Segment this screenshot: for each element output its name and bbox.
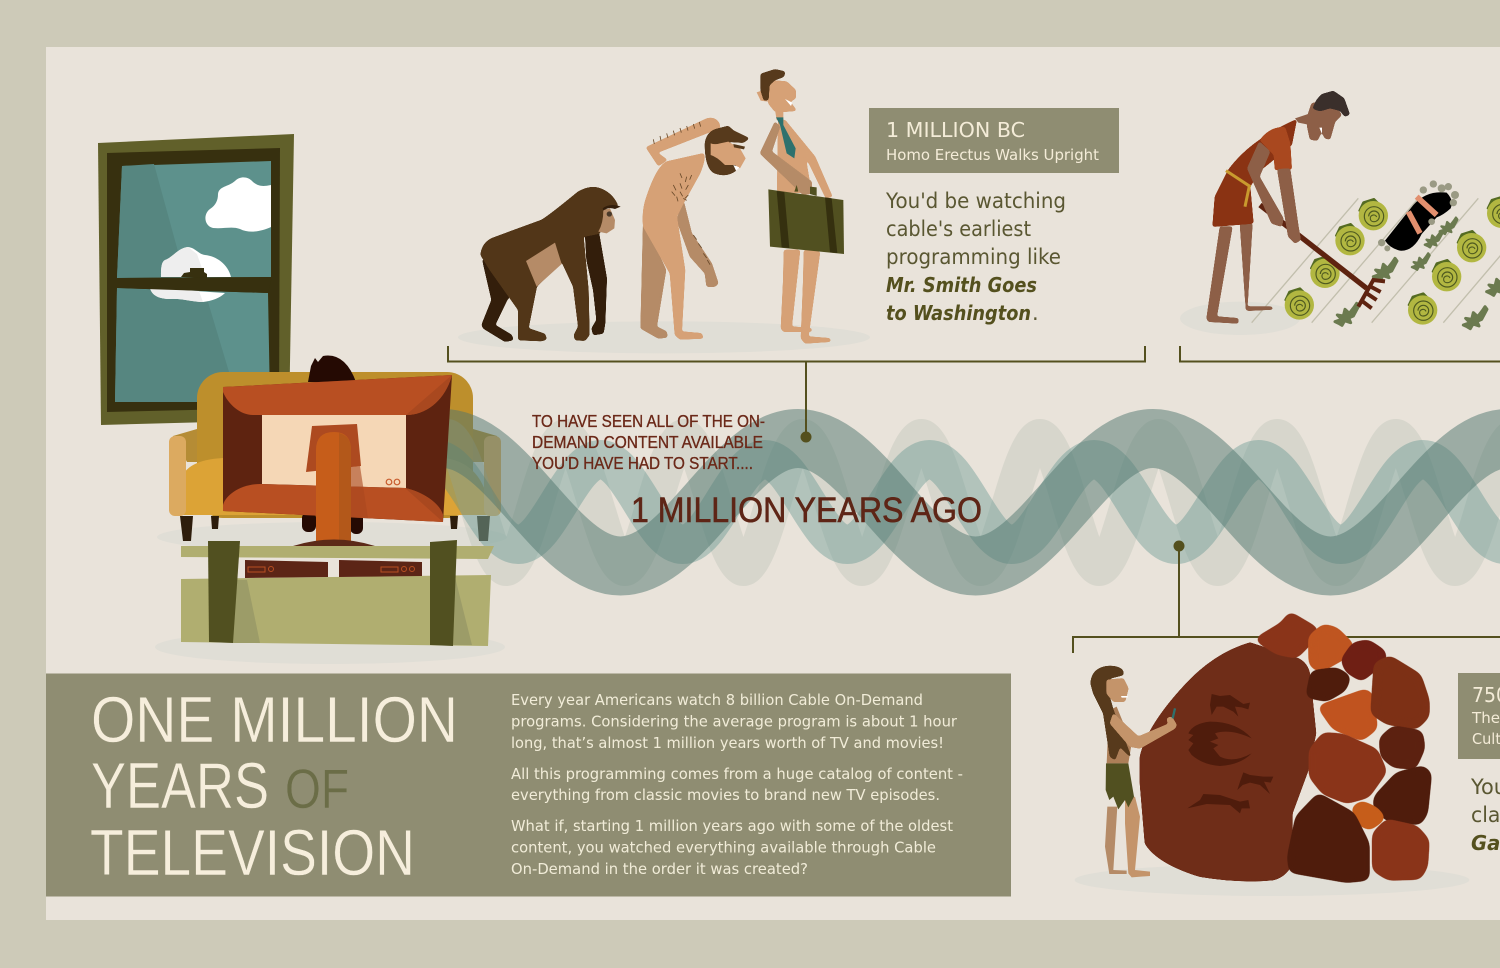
title: ONE MILLION xyxy=(91,683,458,756)
illustration: cave painter and rock wall xyxy=(1075,613,1469,896)
callout: intro to timeline: TO HAVE SEEN ALL OF THE ON- xyxy=(532,411,765,431)
icon: window xyxy=(98,134,294,425)
figure: businessman with briefcase xyxy=(757,69,844,343)
ground shadow xyxy=(1180,302,1300,335)
text: 1 million BC description: cable's earliest xyxy=(886,217,1031,241)
large painted rock xyxy=(1140,643,1316,881)
text: 1 million BC description: You'd be watching xyxy=(885,189,1066,213)
text: introduction: What if, starting 1 million years ago with some of the oldest xyxy=(511,817,953,835)
text: 1 million BC description xyxy=(885,189,1066,325)
icon: television xyxy=(223,375,452,546)
title: TELEVISION xyxy=(90,816,415,889)
title: YEARS xyxy=(91,749,269,822)
panel: 750 label (cropped at edge) xyxy=(1458,673,1500,759)
text: 1 million BC description: to Washington xyxy=(886,301,1031,325)
text: introduction: long, that’s almost 1 million years worth of TV and movies! xyxy=(511,734,944,752)
ground shadow xyxy=(1075,864,1469,896)
text: introduction: Every year Americans watch 8 billion Cable On-Demand xyxy=(511,691,923,709)
wave timeline ribbons xyxy=(436,419,1500,586)
text: 750 description (cropped at edge) xyxy=(1470,775,1500,855)
text: 1 million BC description: Mr. Smith Goes xyxy=(886,273,1037,297)
illustration: evolution from ape to businessman xyxy=(458,69,870,353)
figure: cave painter xyxy=(1091,666,1177,877)
text: introduction: programs. Considering the average program is about 1 hour xyxy=(511,712,958,730)
timeline bracket: cave painter xyxy=(1073,542,1500,653)
text: 1 million BC description: . xyxy=(1032,301,1039,325)
cave paintings xyxy=(1187,694,1273,813)
panel: 750 label (cropped at edge): The xyxy=(1471,709,1500,727)
text: introduction: everything from classic movies to brand new TV episodes. xyxy=(511,786,940,804)
heading: 1 million years ago: 1 MILLION YEARS AGO xyxy=(631,490,982,530)
text: introduction: All this programming comes from a huge catalog of content - xyxy=(511,765,963,783)
panel: 1 million BC label xyxy=(869,108,1119,173)
panel: 1 million BC label: Homo Erectus Walks Upright xyxy=(886,146,1099,164)
cabbages xyxy=(1285,197,1500,325)
icon: couch xyxy=(169,372,501,541)
weeds xyxy=(1335,218,1500,329)
panel: 1 million BC label: 1 MILLION BC xyxy=(886,118,1025,142)
callout: intro to timeline xyxy=(532,411,765,473)
figure: hairy homo erectus xyxy=(641,118,749,339)
timeline bracket: farmer xyxy=(1180,346,1500,362)
panel: title banner xyxy=(46,674,1011,896)
illustration: farmer raking cabbage field xyxy=(1180,91,1500,335)
callout: intro to timeline: DEMAND CONTENT AVAILABLE xyxy=(532,432,763,452)
field rows xyxy=(1252,193,1500,323)
figure: ape xyxy=(481,187,621,342)
ribbon: dark slow wave xyxy=(443,438,1500,566)
ribbon: teal medium wave xyxy=(436,460,1500,544)
ribbon: pale fast wave xyxy=(447,419,1500,586)
figure: farmer xyxy=(1207,91,1350,323)
text: introduction: On-Demand in the order it was created? xyxy=(511,860,808,878)
title: OF xyxy=(285,757,349,820)
timeline bracket: 1 million BC xyxy=(448,346,1145,442)
console shadow xyxy=(155,630,505,664)
ground shadow xyxy=(458,321,870,353)
text: introduction xyxy=(511,691,963,878)
mole hole with hands xyxy=(1378,180,1459,251)
couch shadow xyxy=(157,522,507,552)
text: 1 million BC description: programming like xyxy=(886,245,1061,269)
stacked boulders xyxy=(1255,613,1431,882)
icon: viewer's head and feet xyxy=(302,356,363,534)
icon: TV console xyxy=(181,540,494,646)
rake xyxy=(1260,205,1385,308)
callout: intro to timeline: YOU'D HAVE HAD TO START.... xyxy=(532,453,753,473)
title xyxy=(90,683,458,889)
text: introduction: content, you watched everything available through Cable xyxy=(511,838,936,856)
